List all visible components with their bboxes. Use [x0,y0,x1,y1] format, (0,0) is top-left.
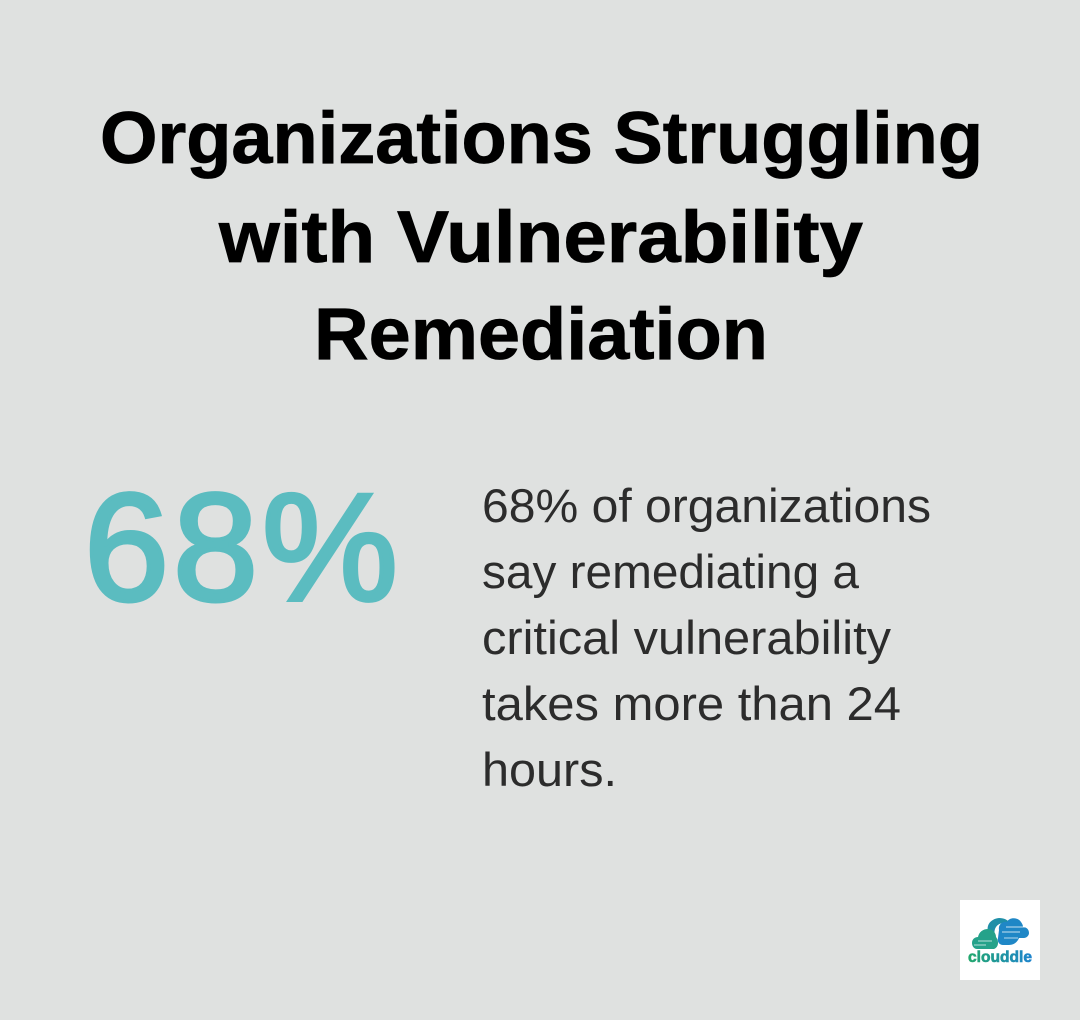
title: with Vulnerability [218,197,863,278]
icon: crescent cloud behind [988,918,1010,936]
big statistic: 68%: 68% [84,462,398,633]
logo: clouddle [960,900,1040,980]
description text: 68% of organizations [482,479,931,532]
icon: left cloud [972,929,998,949]
description text: takes more than 24 [482,677,901,730]
description text: critical vulnerability [482,611,892,664]
title: Organizations Struggling [100,98,983,179]
description text: hours. [482,743,617,796]
title: Remediation [314,294,768,375]
title [100,98,983,375]
description text: say remediating a [482,545,860,598]
icon: right cloud [998,918,1029,945]
icon: circuit lines [974,927,1027,945]
logo wordmark: clouddle [968,949,1032,966]
description text [482,479,931,796]
